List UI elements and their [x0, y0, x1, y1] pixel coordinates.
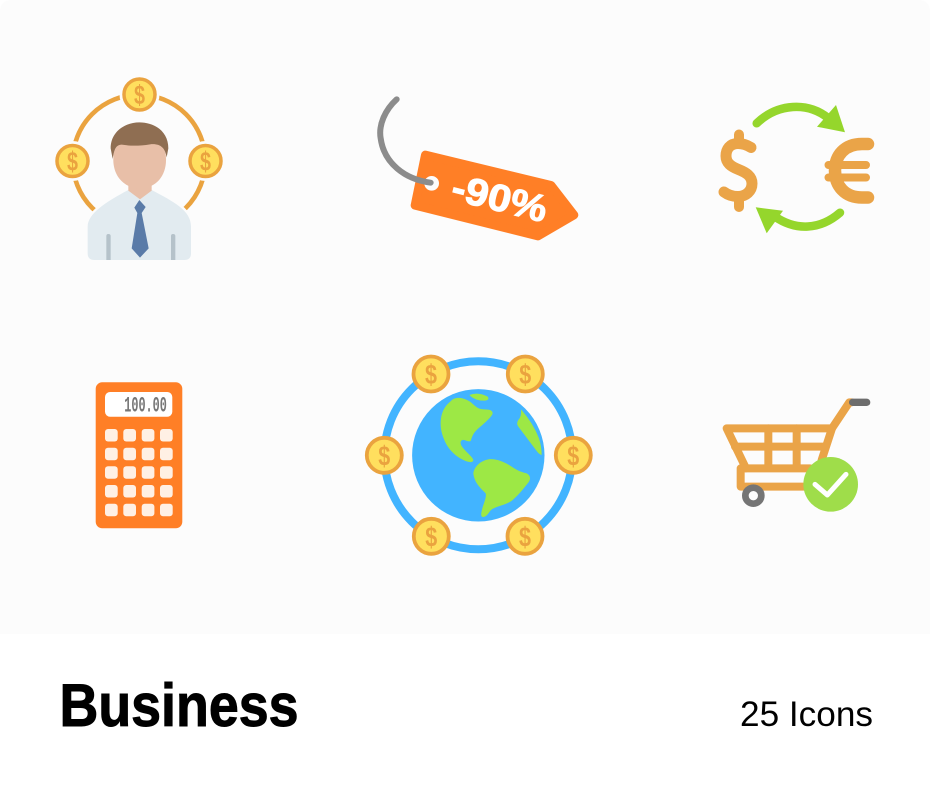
coin: left — [367, 438, 402, 473]
calculator keys — [105, 429, 173, 516]
icon: discount price tag — [380, 99, 574, 236]
coin: lower right — [508, 519, 542, 554]
coin: lower left: $ — [425, 521, 438, 552]
globe — [412, 389, 544, 522]
coin: upper right: $ — [519, 359, 532, 390]
icon: calculator — [96, 382, 182, 528]
coin: left: $ — [378, 440, 391, 471]
calculator display: 100.00 — [124, 394, 167, 418]
check badge — [803, 457, 858, 512]
coin: left — [52, 141, 92, 181]
exchange arrows — [756, 105, 845, 233]
icon: currency exchange — [724, 105, 868, 233]
icon: businessman with coins — [52, 74, 226, 260]
coin: right: $ — [567, 440, 580, 471]
coin: right: $ — [200, 146, 211, 176]
cart frame — [727, 402, 852, 487]
tag body — [380, 99, 574, 236]
discount label: -90% — [447, 167, 552, 231]
orbit ring — [384, 361, 572, 549]
coin: right — [186, 141, 226, 181]
dollar symbol — [724, 134, 752, 207]
coin: top: $ — [134, 80, 145, 110]
icon count: 25 Icons — [740, 695, 873, 734]
coin: upper left — [414, 356, 448, 392]
coin ring — [73, 95, 205, 227]
cart wheel — [745, 488, 761, 504]
cart handle — [853, 391, 867, 413]
icon: shopping cart with check — [727, 402, 867, 512]
coin: top — [120, 74, 160, 114]
euro symbol — [828, 144, 868, 198]
coin: upper right — [508, 356, 543, 392]
coin: left: $ — [67, 146, 78, 176]
person — [88, 122, 191, 260]
calculator display — [105, 392, 172, 418]
coin: lower right: $ — [519, 521, 531, 552]
title: Business — [60, 672, 298, 739]
coin: lower left — [414, 519, 449, 554]
continents — [441, 394, 542, 517]
coin: upper left: $ — [425, 359, 437, 390]
coin: right — [556, 438, 591, 473]
icon: globe with coins — [367, 356, 591, 554]
calculator body — [96, 382, 182, 528]
